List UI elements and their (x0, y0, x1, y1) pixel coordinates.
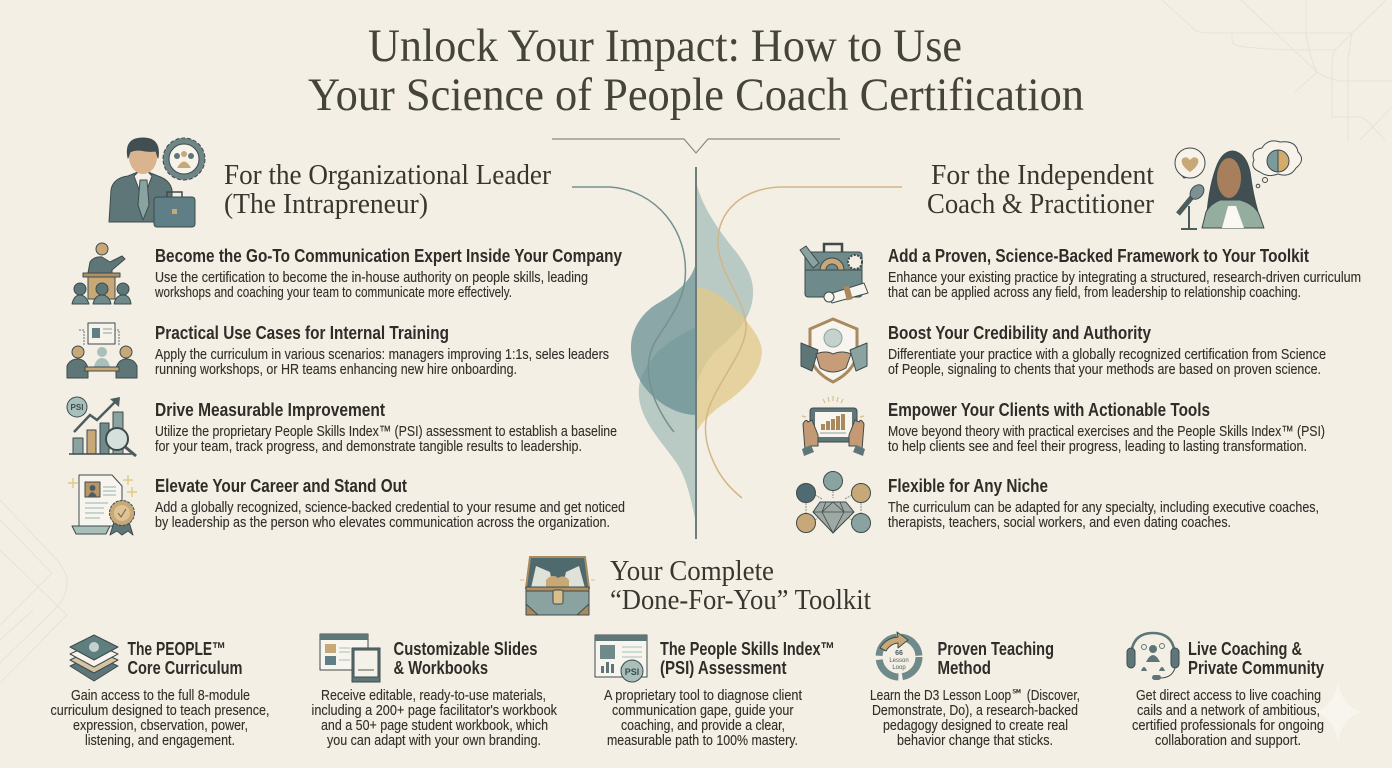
title: Unlock Your Impact: How to Use (368, 20, 962, 72)
item: slides and workbooks (312, 638, 557, 749)
item: any niche: Flexible for Any Niche (888, 475, 1048, 496)
panel: organizational leader items (67, 243, 625, 535)
icon: lesson loop: 66 (895, 650, 903, 657)
item: actionable tools: to help clients see and feel their progress, leading to lasting transformation. (888, 438, 1307, 455)
item: slides and workbooks: Receive editable, ready-to-use materials, (321, 687, 546, 704)
item: framework (888, 245, 1361, 301)
central flowing graphic (572, 167, 902, 539)
icon: diamond network (796, 472, 870, 533)
icon: treasure chest (520, 557, 595, 615)
item: teaching method: pedagogy designed to create real (883, 717, 1068, 734)
item: measurable improvement: for your team, track progress, and demonstrate tangible results to leadership. (155, 438, 582, 455)
item: teaching method: Demonstrate, Do), a research-backed (872, 702, 1078, 719)
icon: improvement chart: PSI (71, 403, 83, 412)
title bracket (552, 139, 840, 153)
item: live coaching: collaboration and support. (1155, 732, 1301, 749)
icon: PSI assessment: PSI (625, 667, 639, 677)
item: PSI assessment: coaching, and provide a clear, (621, 717, 785, 734)
heading: independent coach: Coach & Practitioner (927, 189, 1155, 220)
item: PSI assessment: (PSI) Assessment (660, 657, 786, 678)
item: PSI assessment: A proprietary tool to diagnose client (604, 687, 803, 704)
icon: lesson loop: Loop (892, 665, 906, 671)
panel: toolkit items (50, 632, 1325, 749)
item: teaching method: Learn the D3 Lesson Loop℠ (Discover, (870, 687, 1080, 704)
item: live coaching: Private Community (1188, 657, 1325, 678)
title: Your Science of People Coach Certification (308, 69, 1084, 121)
item: core curriculum: listening, and engagement. (85, 732, 235, 749)
item: teaching method: Proven Teaching (938, 638, 1054, 659)
heading: toolkit (610, 556, 871, 616)
item: go-to expert: Use the certification to become the in-house authority on people skills, leading (155, 269, 588, 286)
icon: PSI assessment (595, 635, 647, 682)
item: go-to expert: Become the Go-To Communication Expert Inside Your Company (155, 245, 623, 266)
icon: improvement chart (67, 397, 136, 456)
icon: resume with medal (68, 475, 137, 535)
item: live coaching: cails and a network of ambitious, (1137, 702, 1320, 719)
item: go-to expert (154, 245, 623, 301)
icon: leader with briefcase (109, 138, 205, 227)
heading: independent coach: For the Independent (931, 160, 1154, 191)
icon: slides and workbook (320, 634, 380, 682)
item: teaching method: Method (938, 657, 991, 678)
icon: presenter at podium (72, 243, 131, 304)
item: live coaching: certified professionals for ongoing (1132, 717, 1324, 734)
icon: internal training (67, 323, 137, 378)
item: actionable tools (888, 399, 1325, 455)
icon: coach with microphone (1175, 141, 1302, 229)
item: core curriculum: curriculum designed to teach presence, (50, 702, 270, 719)
sparkle (1315, 682, 1361, 742)
item: PSI assessment: measurable path to 100% mastery. (607, 732, 798, 749)
item: any niche: therapists, teachers, social workers, and even dating coaches. (888, 514, 1231, 531)
item: core curriculum: expression, cbservation, power, (73, 717, 248, 734)
item: credibility: Differentiate your practice with a globally recognized certification from Science (888, 346, 1326, 363)
icon: tablet in hands (802, 396, 865, 456)
item: PSI assessment (604, 638, 835, 749)
item: teaching method (870, 638, 1080, 749)
item: teaching method: behavior change that sticks. (897, 732, 1053, 749)
item: elevate career (155, 475, 625, 531)
item: elevate career: Add a globally recognized, science-backed credential to your resume and get noticed (155, 499, 625, 516)
item: actionable tools: Empower Your Clients with Actionable Tools (888, 399, 1210, 420)
heading: organizational leader (224, 160, 552, 220)
item: slides and workbooks: Customizable Slides (394, 638, 538, 659)
heading: organizational leader: (The Intrapreneur) (224, 189, 428, 220)
item: measurable improvement (155, 399, 617, 455)
item: internal training (155, 322, 609, 378)
icon: toolbox (800, 244, 868, 303)
item: core curriculum (50, 638, 270, 749)
item: core curriculum: The PEOPLE™ (128, 638, 226, 659)
item: go-to expert: workshops and coaching your team to communicate more effectively. (154, 284, 512, 301)
heading: toolkit: Your Complete (610, 556, 774, 587)
icon: headset community (1127, 633, 1179, 680)
panel: independent coach items (796, 244, 1361, 533)
heading: organizational leader: For the Organizational Leader (224, 160, 552, 191)
item: any niche: The curriculum can be adapted for any specialty, including executive coaches, (888, 499, 1319, 516)
item: any niche (888, 475, 1319, 531)
item: slides and workbooks: you can adapt with your own branding. (327, 732, 541, 749)
item: PSI assessment: The People Skills Index™ (660, 638, 835, 659)
item: internal training: Practical Use Cases for Internal Training (155, 322, 449, 343)
item: core curriculum: Gain access to the full 8-module (71, 687, 250, 704)
item: framework: that can be applied across any field, from leadership to relationship coaching. (888, 284, 1301, 301)
icon: shield handshake (801, 319, 867, 382)
heading: toolkit: “Done-For-You” Toolkit (610, 585, 871, 616)
item: PSI assessment: communication gape, guide your (612, 702, 794, 719)
item: slides and workbooks: & Workbooks (394, 657, 488, 678)
item: slides and workbooks: and a 50+ page student workbook, which (321, 717, 548, 734)
item: elevate career: by leadership as the person who elevates communication across the organization. (155, 514, 610, 531)
item: credibility: Boost Your Credibility and Authority (888, 322, 1152, 343)
item: internal training: running workshops, or HR teams enhancing new hire onboarding. (155, 361, 517, 378)
item: live coaching (1132, 638, 1325, 749)
title (308, 20, 1084, 121)
item: measurable improvement: Utilize the proprietary People Skills Index™ (PSI) assessment to establish a baseline (155, 423, 617, 440)
item: internal training: Apply the curriculum in various scenarios: managers improving 1:1s, seles leaders (155, 346, 609, 363)
icon: lesson loop (879, 632, 919, 677)
icon: layered curriculum (70, 635, 118, 681)
item: framework: Add a Proven, Science-Backed Framework to Your Toolkit (888, 245, 1309, 266)
item: elevate career: Elevate Your Career and Stand Out (155, 475, 407, 496)
item: measurable improvement: Drive Measurable Improvement (155, 399, 385, 420)
item: core curriculum: Core Curriculum (128, 657, 242, 678)
heading: independent coach (927, 160, 1155, 220)
icon: lesson loop: Lesson (889, 658, 909, 664)
item: live coaching: Live Coaching & (1188, 638, 1302, 659)
item: live coaching: Get direct access to live coaching (1136, 687, 1321, 704)
item: slides and workbooks: including a 200+ page facilitator's workbook (312, 702, 557, 719)
item: credibility (888, 322, 1326, 378)
